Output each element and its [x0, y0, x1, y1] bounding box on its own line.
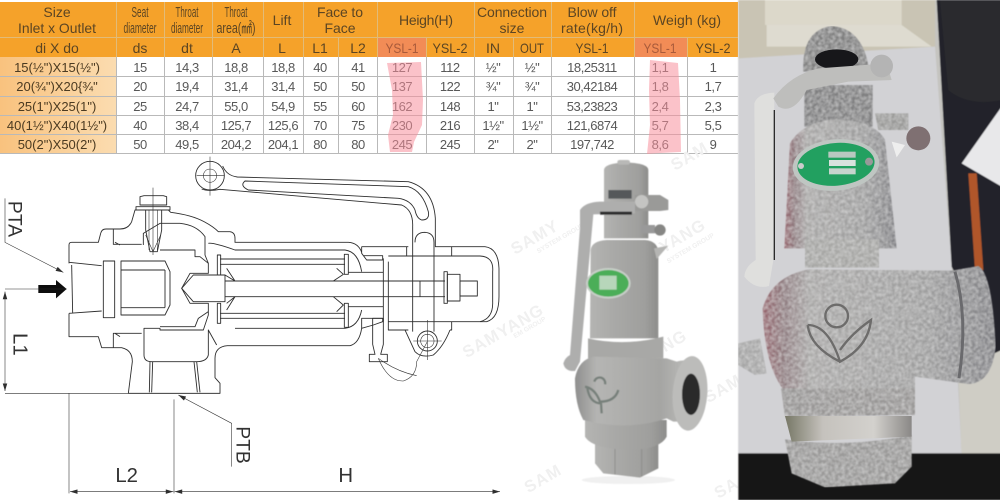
table row 40: 216 — [440, 118, 460, 133]
table column headings: area(㎟) — [216, 20, 256, 37]
photo: cast metal parts — [738, 26, 996, 487]
table column headings: rate(kg/h) — [561, 20, 623, 36]
table row 15 — [14, 60, 717, 75]
table row 50: 245 — [440, 137, 460, 152]
table row 50: 204,2 — [221, 137, 251, 152]
table row 40: 230 — [392, 118, 412, 133]
photographed valve — [738, 26, 996, 487]
table row 20: 30,42184 — [567, 79, 618, 94]
spindle and spring — [182, 254, 445, 327]
table row 25: 162 — [392, 99, 412, 114]
table row 40: 1½" — [521, 118, 543, 133]
table row 40: 125,7 — [221, 118, 251, 133]
table row 40: 5,5 — [705, 118, 722, 133]
table header band — [0, 2, 738, 57]
table column headings: di X do — [35, 40, 79, 56]
table column headings: YSL-1 — [644, 40, 677, 56]
table column headings: Lift — [273, 12, 291, 28]
watermarks — [459, 138, 745, 500]
table row 25: 25(1")X25(1") — [18, 99, 96, 114]
render: hex base — [595, 442, 658, 478]
soft floor shadow — [582, 476, 675, 484]
table row 15: ½" — [525, 60, 540, 75]
table column headings: YSL-1 — [576, 40, 609, 56]
table row 40: 38,4 — [175, 118, 199, 133]
table row 20: 1,8 — [652, 79, 669, 94]
table row 20: 1,7 — [705, 79, 722, 94]
table row 20: 31,4 — [224, 79, 248, 94]
table row 40 — [7, 118, 722, 133]
table row 40: 70 — [313, 118, 327, 133]
table row 50: 2" — [488, 137, 499, 152]
table row 20 — [16, 79, 722, 94]
callout: PTA: PTA — [3, 201, 24, 237]
table row 25: 53,23823 — [567, 99, 618, 114]
render: collar — [588, 337, 663, 358]
photo: lever strap — [773, 63, 892, 109]
table row 25: 55,0 — [224, 99, 248, 114]
table row 20: 50 — [351, 79, 365, 94]
adjusting nut — [444, 272, 477, 303]
table column headings: IN — [486, 40, 500, 56]
table row 15: 18,8 — [271, 60, 295, 75]
table row 40: 125,6 — [268, 118, 298, 133]
watermarks: SAM — [521, 460, 565, 497]
watermarks: SYSTEM GROUP — [666, 232, 716, 265]
table column headings: Connection — [477, 4, 547, 20]
photo: side fittings — [875, 113, 908, 130]
table column headings: L2 — [350, 40, 366, 56]
valve body — [69, 210, 362, 393]
table row 50: 50 — [133, 137, 147, 152]
watermarks: NG — [657, 326, 690, 356]
top bolt — [136, 188, 170, 255]
table row 20: 50 — [313, 79, 327, 94]
table row 15: 1,1 — [652, 60, 669, 75]
table row 50: 49,5 — [175, 137, 199, 152]
table row 50: 204,1 — [268, 137, 298, 152]
render: top cap — [604, 162, 648, 238]
table row 25: 25 — [133, 99, 147, 114]
render: logo — [585, 378, 618, 413]
table row 15: 1 — [710, 60, 717, 75]
table row 15: 41 — [351, 60, 365, 75]
table row 15: ½" — [486, 60, 501, 75]
table row 20: 31,4 — [271, 79, 295, 94]
render: cap window — [608, 190, 632, 199]
table row 20: 20 — [133, 79, 147, 94]
photo: left fitting — [738, 338, 767, 375]
table column headings: Blow off — [568, 4, 617, 20]
watermarks: EM GROUP — [512, 316, 548, 340]
table row 40: 40(1½")X40(1½") — [7, 118, 107, 133]
table row 20: 20(¾")X20{¾" — [16, 79, 98, 94]
table row 20: ¾" — [486, 79, 501, 94]
table column headings: L — [278, 40, 286, 56]
photo: cast logo — [808, 305, 871, 362]
photo: seal tab — [892, 142, 905, 157]
watermarks: SAM — [701, 370, 745, 407]
table column headings: L1 — [312, 40, 328, 56]
render: lever — [563, 202, 635, 371]
table row 15: 15 — [133, 60, 147, 75]
photo: knob — [870, 55, 893, 77]
table row 20: 122 — [440, 79, 460, 94]
table row 25 — [18, 99, 722, 114]
table row 15: 18,8 — [224, 60, 248, 75]
photo: bonnet — [784, 119, 897, 248]
table row 50: 2" — [527, 137, 538, 152]
table row 40: 121,6874 — [567, 118, 618, 133]
watermarks: YANG — [656, 215, 709, 257]
render: body — [575, 357, 697, 425]
table column headings: Inlet x Outlet — [18, 20, 96, 36]
table row 25: 1" — [527, 99, 538, 114]
render: outlet port — [670, 355, 710, 432]
table row 40: 40 — [133, 118, 147, 133]
table column headings: Heigh(H) — [399, 12, 453, 28]
photo: handle edge — [772, 110, 776, 260]
lower pin and wire seal — [369, 318, 450, 381]
callout: PTA — [3, 198, 63, 272]
table row 15: 40 — [313, 60, 327, 75]
pink highlight: weight YSL-1 — [647, 60, 681, 154]
photo: cap slot — [815, 49, 858, 69]
render: side bolts — [635, 195, 668, 211]
table row 25: 24,7 — [175, 99, 199, 114]
photo: hex neck — [805, 239, 879, 268]
table column headings: Size — [43, 4, 71, 20]
table row 50: 80 — [313, 137, 327, 152]
product render with watermark — [459, 138, 745, 500]
table body background — [0, 57, 738, 154]
lever — [196, 157, 435, 332]
dimension L2 and H: L2 — [115, 465, 138, 487]
table row 20: 137 — [392, 79, 412, 94]
table row 20: 19,4 — [175, 79, 199, 94]
table row 25: 148 — [440, 99, 460, 114]
callout: PTB — [178, 395, 253, 467]
photo: lower ring — [781, 388, 915, 417]
table row 25: 2,4 — [652, 99, 669, 114]
table row 25: 1" — [488, 99, 499, 114]
table row 40: 75 — [351, 118, 365, 133]
photo: handle — [744, 93, 774, 287]
table column headings: diameter — [171, 20, 203, 37]
table row 25: 2,3 — [705, 99, 722, 114]
table row 20: ¾" — [525, 79, 540, 94]
table row 50: 80 — [351, 137, 365, 152]
table row 50: 50(2")X50(2") — [18, 137, 96, 152]
table row 15: 14,3 — [175, 60, 199, 75]
photo: wing nut — [906, 126, 930, 150]
table row 50: 8,6 — [652, 137, 669, 152]
table row 15: 112 — [440, 60, 460, 75]
photo background — [738, 0, 1000, 500]
table column headings: Face — [324, 20, 356, 36]
bonnet cap — [362, 247, 499, 330]
table row 40: 1½" — [482, 118, 504, 133]
valve render — [563, 160, 710, 484]
dimension L1 — [5, 289, 220, 393]
photo: neck — [804, 85, 873, 127]
table column headings: Seat — [132, 4, 149, 21]
watermarks: SAMY — [507, 216, 562, 258]
table column headings: OUT — [520, 40, 544, 56]
table row 50 — [18, 137, 717, 152]
render: nameplate — [586, 268, 631, 299]
render: lower ring — [585, 420, 667, 450]
table row 50: 245 — [392, 137, 412, 152]
table row 15: 127 — [392, 60, 412, 75]
photo of real valve — [738, 0, 1000, 500]
table column headings: Throat — [176, 4, 199, 21]
technical drawing — [3, 157, 500, 493]
table row 15: 15(½")X15(½") — [14, 60, 100, 75]
table row 40: 5,7 — [652, 118, 669, 133]
table row 15: 18,25311 — [567, 60, 617, 75]
table column headings: dt — [181, 40, 193, 56]
photo: cap — [803, 26, 869, 72]
table row 25: 55 — [313, 99, 327, 114]
table column headings: Face to — [317, 4, 363, 20]
table column headings — [18, 4, 731, 56]
photo: silver band — [785, 416, 912, 442]
table row 50: 9 — [710, 137, 717, 152]
photo: nameplate — [791, 136, 881, 194]
table column headings: YSL-2 — [432, 40, 468, 56]
table row 50: 197,742 — [570, 137, 614, 152]
table column headings: A — [231, 40, 241, 56]
dimension L2 and H: H — [338, 465, 353, 487]
watermarks: SAMYANG — [459, 300, 547, 362]
table column headings: YSL-2 — [696, 40, 731, 56]
watermarks: SAM — [667, 138, 712, 174]
table row 25: 54,9 — [271, 99, 295, 114]
table grid lines — [0, 2, 738, 154]
photo: main body — [763, 266, 996, 392]
table column headings: ds — [133, 40, 147, 56]
pink highlight: height YSL-1 — [387, 62, 423, 152]
table column headings: YSL-1 — [386, 40, 419, 56]
photo: hex base — [785, 435, 912, 487]
arrow: inlet flow — [38, 280, 67, 298]
watermarks: SYSTEM GROUP — [536, 222, 586, 255]
table column headings: size — [500, 20, 525, 36]
render: main cylinder — [590, 240, 658, 338]
dimension L2 and H — [69, 393, 500, 493]
callout: PTB: PTB — [232, 426, 253, 464]
dimension L1: L1 — [8, 333, 30, 356]
table column headings: diameter — [124, 20, 157, 37]
table column headings: Weigh (kg) — [653, 12, 721, 28]
photo: outlet rim shading — [955, 272, 963, 378]
table row 25: 60 — [351, 99, 365, 114]
spec table — [0, 2, 738, 154]
table column headings: Throat — [224, 4, 248, 21]
